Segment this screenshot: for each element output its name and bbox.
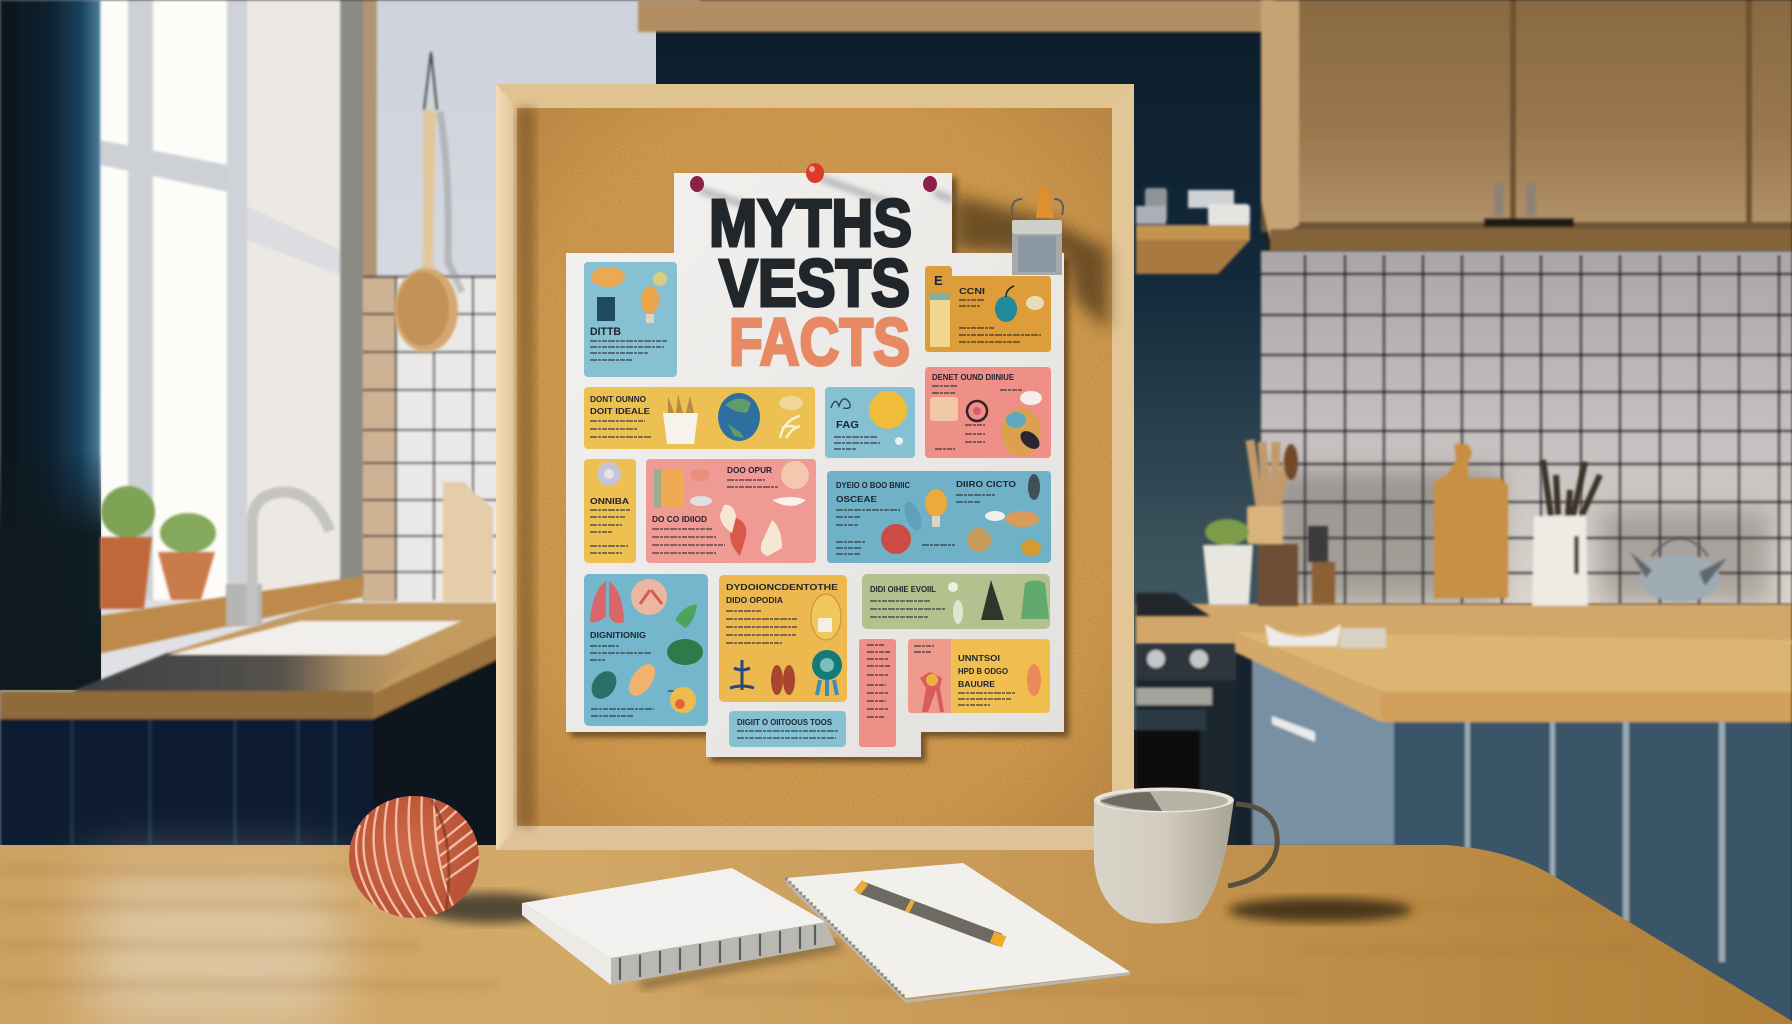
panel: blue tall card: DIGNITIONIG [590,630,646,640]
pin shadows on poster [700,178,952,205]
wooden frame [496,84,1134,850]
pen [858,885,1004,942]
panel: yellow centre card: DYDOIONCDENTOTHE [726,582,838,592]
panel: blue bottom card: DIGIIT O OIITOOUS TOOS [737,717,832,727]
hanging wooden ladle [394,52,462,352]
coffee mug [1094,788,1277,924]
panel: green card [862,574,1050,629]
panel: yellow centre card [719,575,847,702]
panel: blue wide card: OSCEAE [836,494,877,504]
panel: blue wide card [827,471,1051,563]
notebook open spiral [786,863,1130,1003]
poster [566,173,1064,757]
panel: orange card top right [925,266,1051,352]
cork board [496,84,1134,850]
inner frame shadow [517,108,535,826]
panel: pink and yellow card [908,639,1050,713]
panel: pink and yellow card: BAUURE [958,679,995,689]
pin: maroon left [690,176,704,192]
wooden cutting board left [443,482,493,602]
pin: red [806,163,824,183]
panel: yellow wide card [584,387,815,449]
stove [1136,593,1254,845]
top valance [638,0,1275,32]
panel: pink narrow strip [859,639,896,747]
panel: yellow wide card: DONT OUNNO [590,394,646,404]
panel: blue wide card: DIIRO CICTO [956,479,1016,489]
counter objects: utensils, plant, knives, board, crock, teapot [1203,440,1727,606]
panel: yellow narrow card: ONNIBA [590,496,629,506]
faucet [226,492,330,626]
panel: pink wide card [646,459,816,563]
panel: pink card right: DENET OUND DIINIUE [932,373,1015,382]
panel: blue small card [825,387,915,458]
dark left column [0,0,100,690]
title: myths vests facts: FACTS [729,305,910,380]
panel: blue myths card [584,262,677,377]
metal clip holder [1012,188,1063,275]
upper cabinets [1261,0,1792,251]
cork surface [517,108,1112,826]
back counter top [1136,604,1792,644]
panel: pink card right [925,367,1051,458]
kitchen island [1235,624,1792,1022]
title: myths vests facts [709,186,912,380]
holder shadow [955,195,1108,330]
panel: orange card top right: CCNI [959,286,985,296]
panel: orange card top right: E [934,273,943,288]
sink [168,621,462,655]
panel: blue tall card [584,574,708,726]
panel: pink and yellow card: HPD B ODGO [958,666,1008,676]
title: myths vests facts: MYTHS [709,186,912,261]
panel: pink wide card: DOO OPUR [727,465,772,475]
panel: blue small card: FAG [836,420,859,431]
panel: blue wide card: DYEIO O BOO BNIIC [836,480,910,490]
title: myths vests facts: VESTS [719,246,910,321]
poster shadow [571,178,1069,762]
ball of yarn [349,794,480,920]
wall shelf with cups [1136,188,1250,274]
potted plants [100,486,216,609]
back wall tiles right [1261,251,1792,604]
wall tiles left [363,277,498,602]
notebook closed [522,868,836,985]
panel: yellow centre card: DIDO OPODIA [726,595,783,605]
pin: maroon right [923,176,937,192]
panel: green card: DIDI OIHIE EVOIIL [870,584,936,594]
window sill [70,576,363,660]
left counter [0,603,500,850]
panel: pink wide card: DO CO IDIIOD [652,514,707,524]
back wall right [656,30,1266,730]
panel: pink and yellow card: UNNTSOI [958,653,1000,663]
background wall left and window [0,0,700,860]
panel: blue bottom card [729,711,846,747]
dark lower shadow on column [0,450,101,690]
panel: blue myths card: DITTB [590,326,621,338]
panel: yellow wide card: DOIT IDEALE [590,406,650,416]
panel: yellow narrow card [584,459,636,563]
table [0,845,1792,1024]
